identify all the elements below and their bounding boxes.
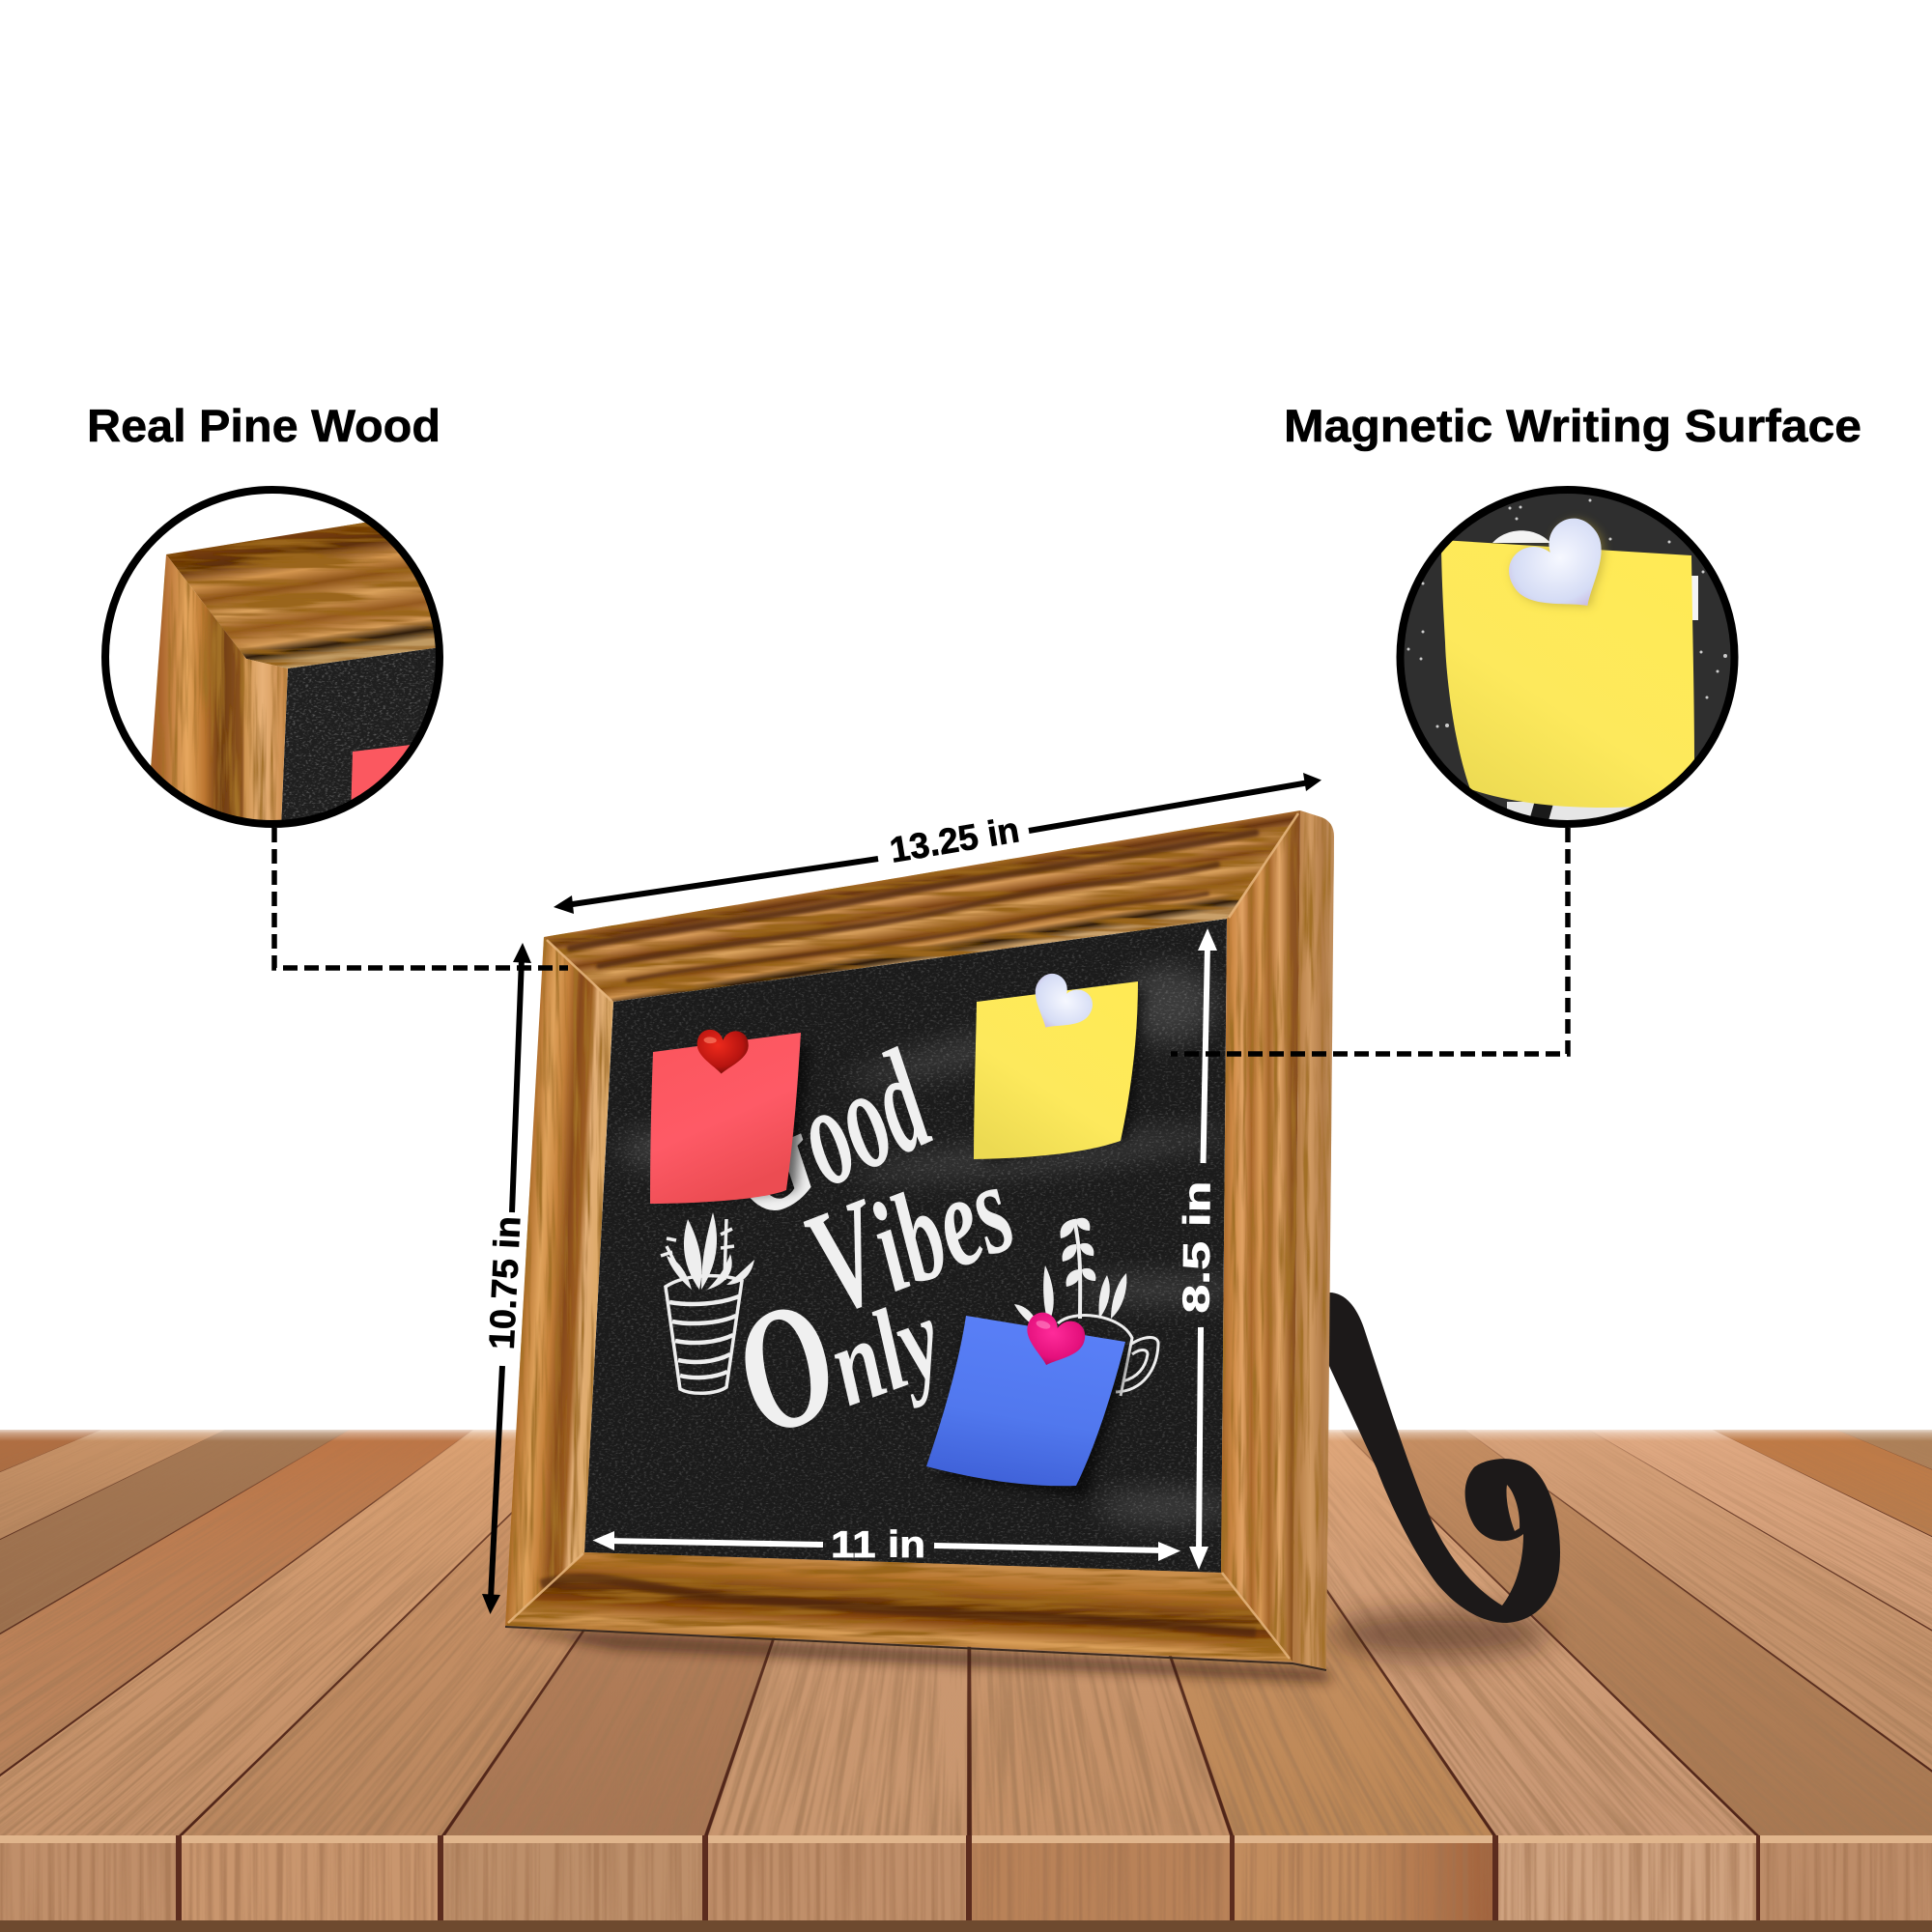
metal easel stand	[1328, 1293, 1560, 1623]
dimension arrow: 10.75 in	[482, 943, 531, 1614]
detail circle: magnetic surface with note	[1401, 490, 1735, 840]
chalk lettering	[745, 1045, 1012, 1428]
frame right rail	[1221, 810, 1300, 1662]
wooden table top in perspective	[0, 1424, 1932, 1843]
dimension arrow: 8.5 in: 8.5 in	[1176, 1180, 1219, 1314]
dimension arrow: 13.25 in: 13.25 in	[887, 810, 1022, 870]
chalk drawing: mug with plant	[1014, 1218, 1158, 1396]
chalk word Only: Only	[710, 1224, 961, 1473]
enlarged white heart magnet	[1499, 508, 1631, 637]
magnet: pink heart	[1018, 1309, 1089, 1374]
dashed connector: pine wood	[274, 828, 568, 968]
dashed connector: magnetic surface	[1171, 828, 1568, 1054]
dimension arrow: 13.25 in	[554, 773, 1321, 914]
heading: Real Pine Wood: Real Pine Wood	[87, 400, 440, 451]
magnet: red heart	[696, 1029, 749, 1075]
dimension arrow: 8.5 in	[1176, 928, 1219, 1570]
sticky note: yellow	[974, 981, 1138, 1159]
chalk word Vibes: Vibes	[785, 1121, 1033, 1347]
char streak on bottom rail	[541, 1578, 1256, 1633]
frame side edge	[1293, 810, 1334, 1669]
sticky note shadows	[667, 989, 1146, 1497]
chalk word Good: Good	[678, 972, 957, 1262]
chalkboard surface	[584, 919, 1246, 1573]
shadow under frame	[507, 1629, 1333, 1683]
frame left rail	[505, 937, 613, 1626]
dimension arrow: 10.75 in: 10.75 in	[482, 1215, 527, 1350]
frame top rail	[544, 810, 1300, 1002]
heading: Magnetic Writing Surface: Magnetic Writing Surface	[1284, 400, 1861, 451]
mitre highlights	[508, 813, 1298, 1659]
frame bottom rail	[505, 1552, 1293, 1662]
sticky note: blue	[926, 1316, 1125, 1486]
magnet: white heart	[1020, 968, 1098, 1043]
char streaks on top rail	[570, 833, 1256, 980]
wooden frame	[505, 810, 1334, 1670]
dimension arrow: 11 in	[593, 1524, 1180, 1566]
table front edge	[0, 1835, 1932, 1932]
detail circle: pine wood corner	[105, 490, 454, 850]
chalk drawing: potted plant	[661, 1212, 754, 1393]
dimension arrow: 11 in: 11 in	[831, 1524, 925, 1566]
table planks	[0, 1430, 1932, 1835]
shadow of easel stand	[1328, 1611, 1550, 1658]
far edge fade	[0, 1424, 1932, 1441]
sticky note: red	[650, 1033, 801, 1204]
